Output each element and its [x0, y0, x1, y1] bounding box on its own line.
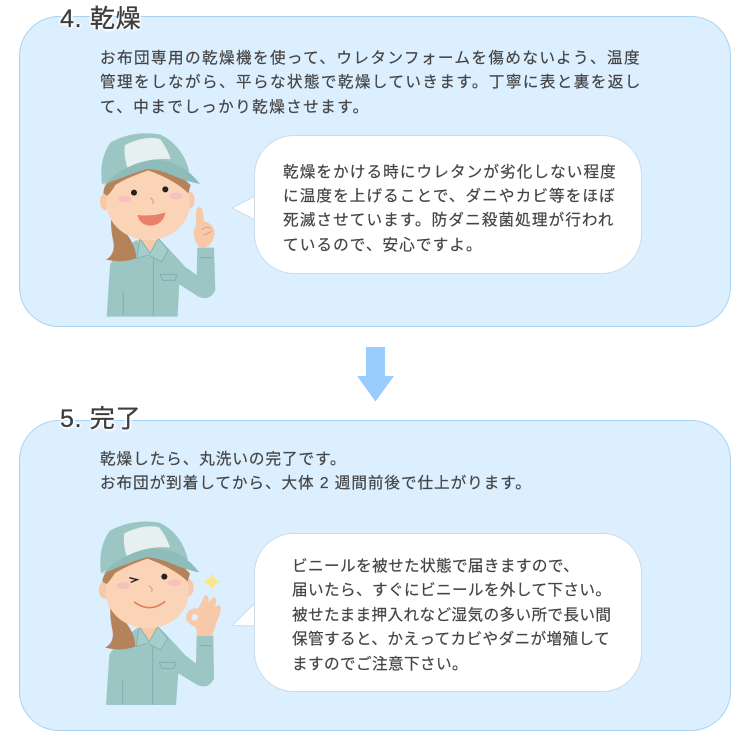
text block: step 5 description: 乾燥したら、丸洗いの完了です。	[100, 451, 347, 468]
bubble text: step 5	[292, 558, 611, 673]
bubble text: step 4: に温度を上げることで、ダニやカビ等をほぼ	[283, 188, 616, 205]
bubble text: step 4: 乾燥をかける時にウレタンが劣化しない程度	[283, 164, 617, 180]
text block: step 5 description: お布団が到着してから、大体 2 週間前後で仕上がります。	[100, 475, 532, 492]
bubble text: step 5: 被せたまま押入れなど湿気の多い所で長い間	[292, 607, 611, 624]
text block: step 4 description: お布団専用の乾燥機を使って、ウレタンフォームを傷めないよう、温度	[100, 50, 641, 67]
bubble text: step 4: ているので、安心ですよ。	[283, 237, 483, 254]
panel: step 5 complete	[19, 420, 731, 731]
text block: step 5 description	[100, 450, 532, 492]
speech bubble: step 4	[254, 135, 642, 274]
bubble text: step 4: 死滅させています。防ダニ殺菌処理が行われ	[283, 212, 615, 229]
speech bubble tail: step 5	[231, 604, 254, 626]
icon: worker pointing finger	[100, 133, 216, 317]
bubble text: step 5: 保管すると、かえってカビやダニが増殖して	[292, 631, 610, 648]
text block: step 4 description: て、中までしっかり乾燥させます。	[100, 99, 370, 116]
text block: step 4 description: 管理をしながら、平らな状態で乾燥していきます。丁寧に表と裏を返し	[100, 74, 642, 91]
bubble text: step 5: 届いたら、すぐにビニールを外して下さい。	[292, 582, 611, 599]
bubble text: step 4	[283, 164, 617, 254]
text block: step 4 description	[100, 50, 642, 116]
icon: worker giving OK sign	[98, 522, 222, 705]
heading: step 5: 5. 完了	[60, 405, 141, 433]
speech bubble: step 5	[254, 533, 642, 692]
speech bubble tail: step 4	[231, 196, 254, 220]
bubble text: step 5: ますのでご注意下さい。	[292, 656, 468, 673]
panel: step 4 drying	[19, 16, 731, 327]
heading: step 4: 4. 乾燥	[60, 5, 141, 33]
arrow: down to next step	[357, 347, 394, 402]
bubble text: step 5: ビニールを被せた状態で届きますので、	[292, 558, 579, 575]
